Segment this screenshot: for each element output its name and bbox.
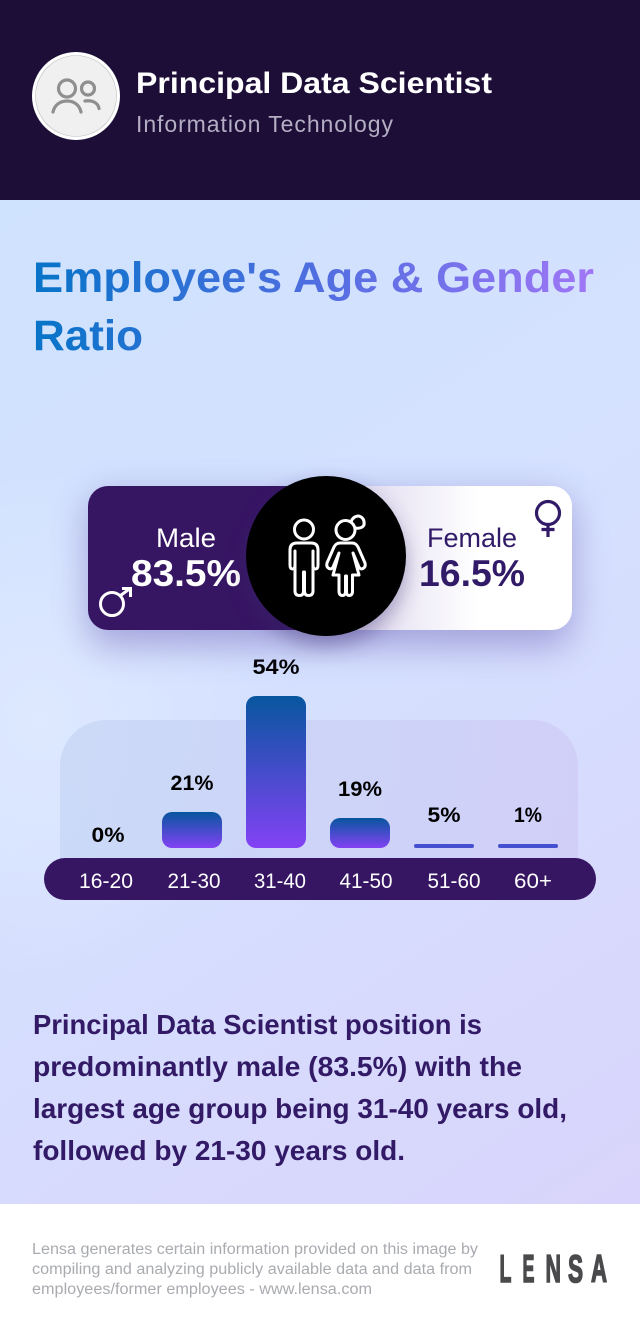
- chart backdrop: [60, 720, 578, 860]
- summary text: Principal Data Scientist position is: [33, 1009, 482, 1040]
- bar: 41-50: 19%: [338, 778, 382, 801]
- bar: 60+: [498, 804, 558, 848]
- logo: LENSA: N: [546, 1247, 561, 1291]
- bar: 21-30: 21%: [170, 772, 214, 795]
- job title: Principal Data Scientist: [136, 67, 492, 100]
- chart: age distribution: [44, 656, 596, 900]
- disclaimer text: Lensa generates certain information provided on this image by: [32, 1241, 478, 1258]
- bar: 31-40: [246, 656, 306, 848]
- bar: 16-20: 0%: [92, 824, 125, 847]
- heading: [33, 254, 594, 360]
- icon: female symbol: [536, 502, 560, 537]
- bar: 31-40: 54%: [252, 656, 300, 679]
- job category: Information Technology: [136, 111, 394, 137]
- disclaimer text: [32, 1241, 478, 1298]
- circle badge with figures: [246, 476, 406, 636]
- age axis pill: 21-30: [168, 870, 220, 893]
- male side: [88, 486, 326, 630]
- male side: 83.5%: [131, 553, 241, 594]
- female side: 16.5%: [419, 553, 525, 594]
- bar: 41-50: [330, 778, 390, 848]
- disclaimer text: compiling and analyzing publicly available data and data from: [32, 1261, 472, 1278]
- age axis pill: 31-40: [254, 870, 306, 893]
- logo: LENSA: S: [568, 1247, 583, 1291]
- female side: [326, 486, 572, 630]
- logo: LENSA: L: [500, 1247, 511, 1291]
- age axis pill: 60+: [514, 870, 552, 893]
- logo: LENSA: [500, 1246, 607, 1291]
- page background: [0, 200, 640, 1204]
- age axis pill: 16-20: [79, 870, 133, 893]
- icon: boy: [290, 520, 318, 596]
- bar: 21-30: [162, 772, 222, 848]
- bar: 51-60: [414, 804, 474, 848]
- summary text: [33, 1009, 567, 1166]
- icon: people avatar: [32, 52, 120, 140]
- icon: male symbol: [100, 588, 130, 616]
- age axis pill: 41-50: [340, 870, 392, 893]
- logo: LENSA: A: [591, 1246, 607, 1291]
- male side: Male: [156, 523, 216, 553]
- bar: 60+: 1%: [514, 804, 542, 827]
- heading: Ratio: [33, 312, 143, 360]
- summary text: largest age group being 31-40 years old,: [33, 1093, 567, 1124]
- bar: 51-60: 5%: [428, 804, 461, 827]
- panel: gender ratio: [88, 476, 572, 646]
- summary text: predominantly male (83.5%) with the: [33, 1051, 522, 1082]
- icon: girl: [327, 516, 365, 596]
- age axis pill: 51-60: [428, 870, 480, 893]
- female side: Female: [427, 523, 517, 553]
- logo: LENSA: E: [522, 1249, 534, 1291]
- summary text: followed by 21-30 years old.: [33, 1135, 405, 1166]
- heading: Employee's Age & Gender: [33, 254, 594, 302]
- age axis pill: [44, 858, 596, 900]
- disclaimer text: employees/former employees - www.lensa.com: [32, 1281, 372, 1298]
- header band: [0, 0, 640, 200]
- footer: [0, 1204, 640, 1332]
